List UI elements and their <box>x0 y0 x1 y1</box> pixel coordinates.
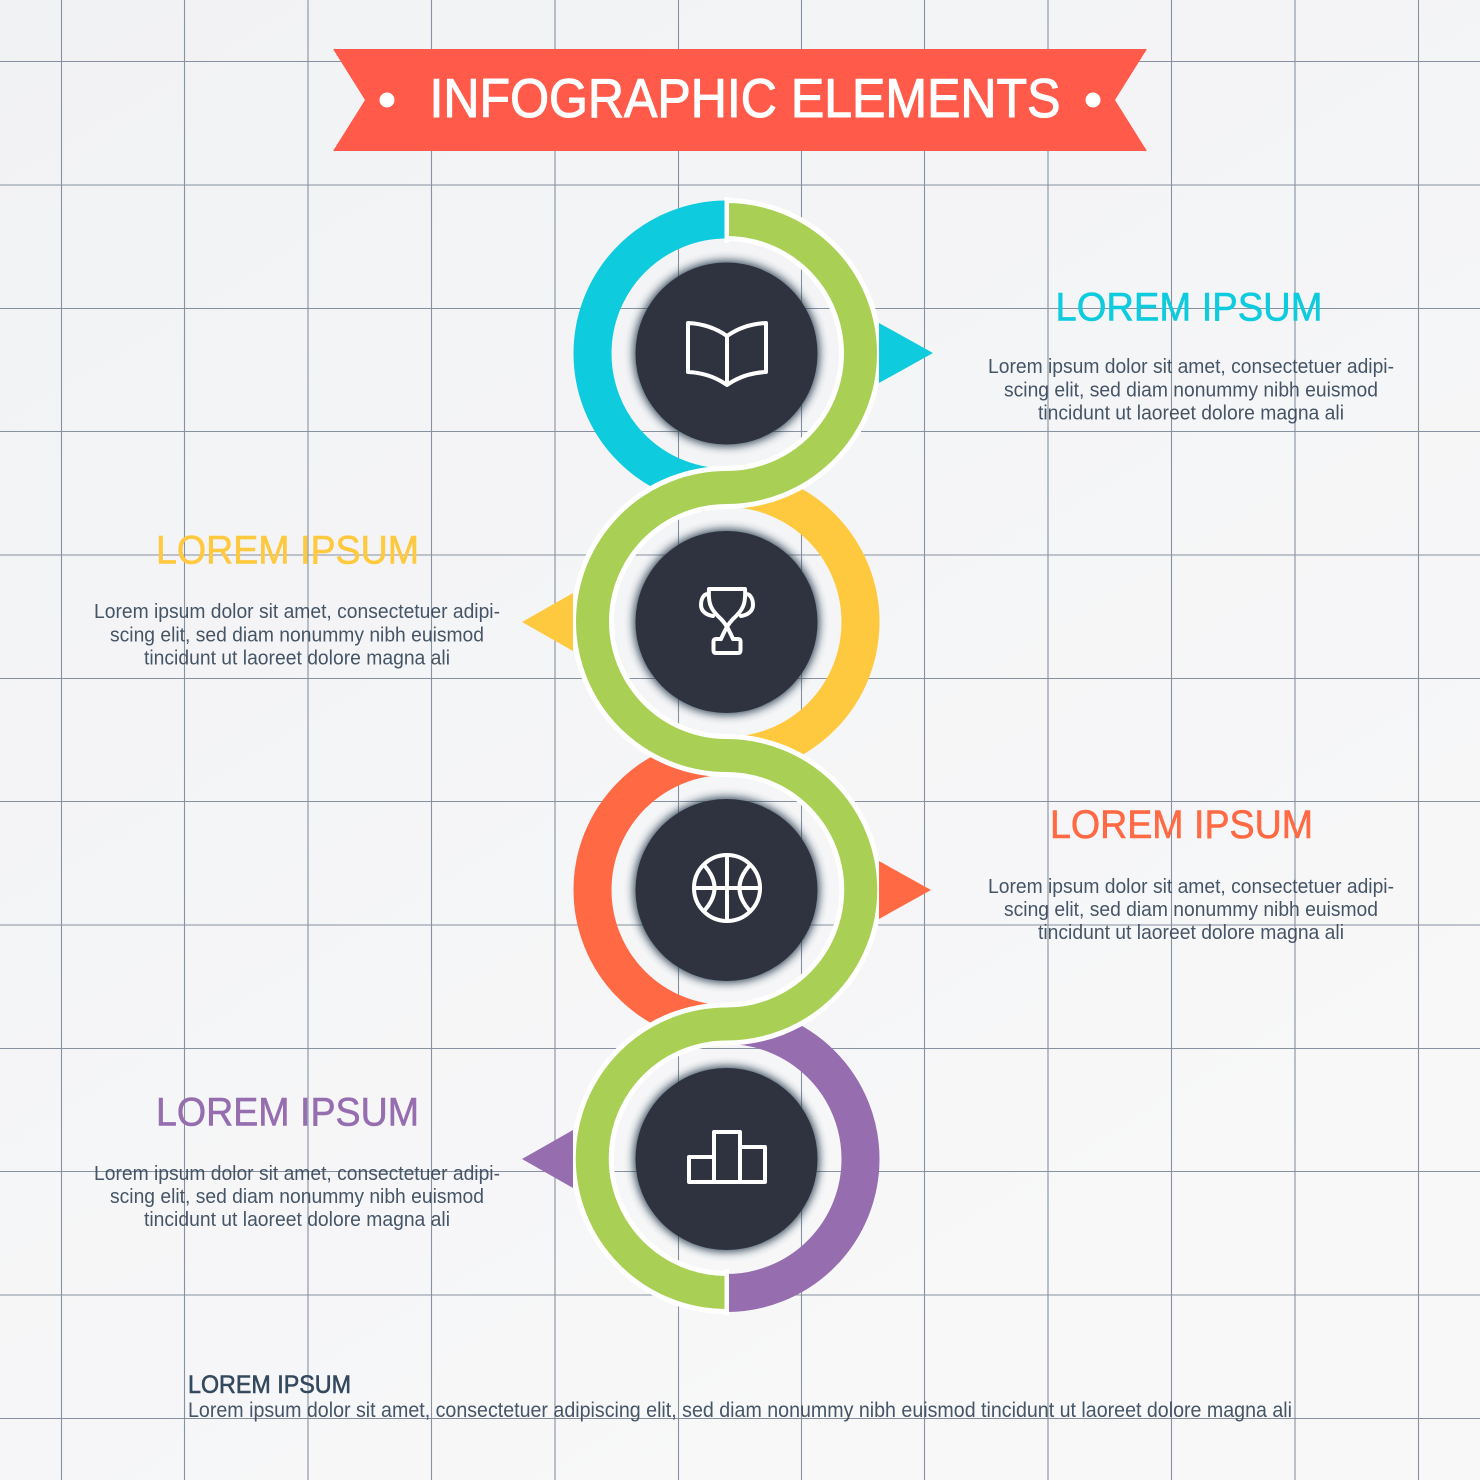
icon: book <box>688 323 766 385</box>
icon: trophy <box>701 589 753 653</box>
ring arc: yellow <box>726 488 860 756</box>
description: red <box>988 876 1394 944</box>
description: purple <box>94 1163 500 1231</box>
serpentine timeline <box>592 197 861 1315</box>
pointer: yellow <box>522 593 573 651</box>
pointer: purple <box>522 1130 573 1188</box>
text block: yellow <box>94 528 500 670</box>
bottom gap <box>724 1269 729 1315</box>
text block: cyan <box>988 286 1394 424</box>
heading: cyan: LOREM IPSUM <box>1056 286 1322 330</box>
banner right dot <box>1086 92 1100 108</box>
description: purple: tincidunt ut laoreet dolore magna ali <box>144 1209 450 1231</box>
node: book <box>634 260 820 446</box>
heading: purple: LOREM IPSUM <box>156 1090 419 1134</box>
icon: podium <box>689 1132 765 1182</box>
ring arc: cyan <box>592 220 726 488</box>
node: podium <box>634 1066 820 1252</box>
description: cyan: scing elit, sed diam nonummy nibh euismod <box>1004 380 1378 402</box>
green ribbon outline <box>592 220 861 1292</box>
ring arc: red <box>592 756 726 1024</box>
heading: red: LOREM IPSUM <box>1050 803 1313 847</box>
description: yellow: tincidunt ut laoreet dolore magna ali <box>144 648 450 670</box>
description: red: tincidunt ut laoreet dolore magna ali <box>1038 922 1344 944</box>
title: INFOGRAPHIC ELEMENTS <box>430 67 1060 129</box>
description: purple: Lorem ipsum dolor sit amet, consectetuer adipi- <box>94 1163 500 1185</box>
description: red: scing elit, sed diam nonummy nibh euismod <box>1004 899 1378 921</box>
footer description: Lorem ipsum dolor sit amet, consectetuer adipiscing elit, sed diam nonummy nibh euismod tincidunt ut laoreet dolore magna ali <box>188 1399 1292 1422</box>
description: cyan: tincidunt ut laoreet dolore magna ali <box>1038 402 1344 424</box>
title banner <box>333 49 1147 151</box>
icon: basketball <box>694 855 760 921</box>
description: yellow <box>94 601 500 670</box>
footer text block <box>188 1371 1292 1422</box>
description: purple: scing elit, sed diam nonummy nibh euismod <box>110 1186 484 1208</box>
pointer: cyan <box>879 323 933 383</box>
description: cyan <box>988 356 1394 424</box>
description: yellow: Lorem ipsum dolor sit amet, consectetuer adipi- <box>94 601 500 623</box>
top gap <box>724 197 729 243</box>
banner ribbon <box>333 49 1147 151</box>
footer heading: LOREM IPSUM <box>188 1371 351 1399</box>
banner left dot <box>380 92 394 108</box>
node: trophy <box>634 529 820 715</box>
node: basketball <box>634 797 820 983</box>
green ribbon <box>592 220 861 1292</box>
ring arc: purple <box>726 1025 860 1293</box>
description: cyan: Lorem ipsum dolor sit amet, consectetuer adipi- <box>988 356 1394 378</box>
description: red: Lorem ipsum dolor sit amet, consectetuer adipi- <box>988 876 1394 898</box>
text block: red <box>988 803 1394 944</box>
heading: yellow: LOREM IPSUM <box>156 528 419 572</box>
text block: purple <box>94 1090 500 1231</box>
description: yellow: scing elit, sed diam nonummy nibh euismod <box>110 624 484 646</box>
pointer: red <box>879 861 931 919</box>
